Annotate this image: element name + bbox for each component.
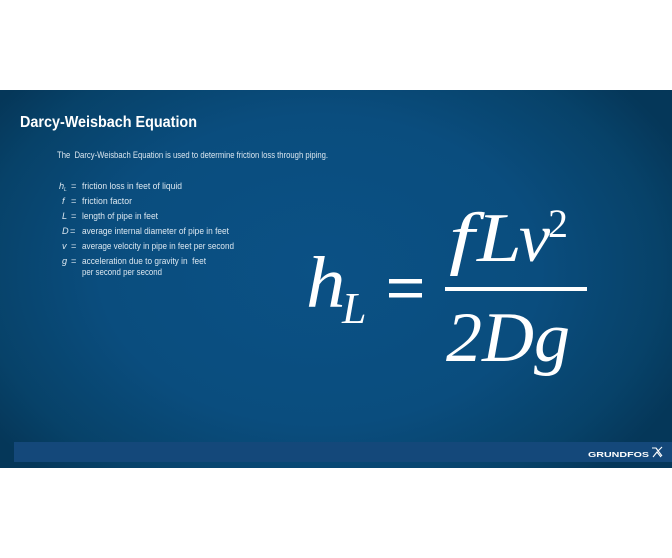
definition: h_L: h xyxy=(59,181,64,191)
numerator: 2 xyxy=(548,201,568,246)
definition: g xyxy=(62,256,206,277)
numerator: v xyxy=(519,200,551,277)
numerator: L xyxy=(476,200,522,277)
equals sign xyxy=(389,279,422,298)
definition: g: = xyxy=(71,256,76,266)
variable definitions list xyxy=(59,181,234,277)
definition: D: = xyxy=(70,226,75,236)
definition: g: per second per second xyxy=(82,267,162,277)
intro text: The Darcy-Weisbach Equation is used to determine friction loss through piping. xyxy=(57,150,328,160)
definition: f xyxy=(62,196,132,206)
definition: h_L: L xyxy=(64,187,67,193)
definition: g: g xyxy=(62,256,68,266)
equation xyxy=(306,199,587,377)
denominator: 2Dg xyxy=(446,299,570,377)
definition: h_L: friction loss in feet of liquid xyxy=(82,181,182,191)
equation left side: h_L: L xyxy=(341,284,366,333)
equation left side: h_L xyxy=(306,243,366,333)
definition: v: v xyxy=(62,241,68,251)
definition: f: f xyxy=(62,196,66,206)
logo: Grundfos xyxy=(588,447,662,459)
title: Darcy-Weisbach Equation xyxy=(20,114,197,131)
definition: L: length of pipe in feet xyxy=(82,211,158,221)
numerator xyxy=(449,199,568,277)
fraction bar xyxy=(445,287,587,291)
equation left side: h_L: h xyxy=(306,243,345,323)
definition: D: D xyxy=(62,226,69,236)
definition: v: = xyxy=(71,241,76,251)
panel: blue slide background xyxy=(0,90,672,468)
definition: L: = xyxy=(71,211,76,221)
logo: Grundfos: GRUNDFOS xyxy=(588,452,649,459)
definition: f: = xyxy=(71,196,76,206)
definition: v: average velocity in pipe in feet per second xyxy=(82,241,234,251)
icon: Grundfos X mark xyxy=(652,447,662,457)
numerator: f xyxy=(449,199,485,277)
definition: L: L xyxy=(62,211,67,221)
definition: f: friction factor xyxy=(82,196,132,206)
definition: h_L xyxy=(59,181,182,193)
definition: g: acceleration due to gravity in feet xyxy=(82,256,206,266)
footer bar xyxy=(14,442,672,462)
definition: h_L: = xyxy=(71,181,76,191)
definition: D: average internal diameter of pipe in feet xyxy=(82,226,229,236)
